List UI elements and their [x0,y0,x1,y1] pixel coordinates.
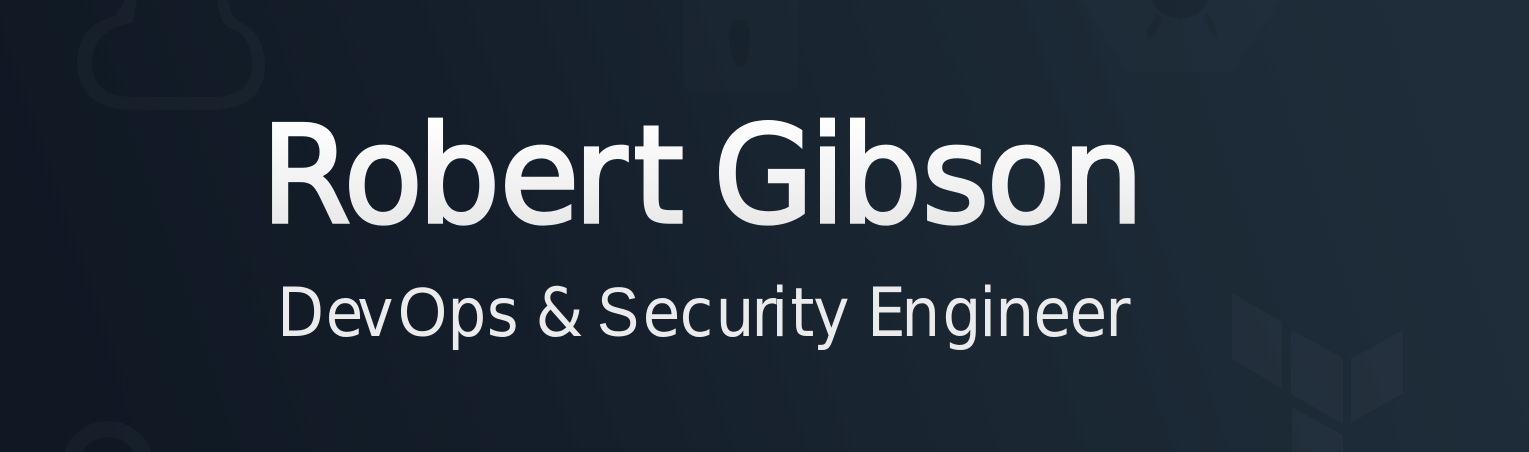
emblem circle [1151,0,1209,18]
emblem right leg [1203,12,1218,38]
title: Robert Gibson [261,98,1144,255]
subtitle: DevOps & Security Engineer [277,274,1131,353]
icon: padlock [683,0,798,92]
keyhole [729,20,750,67]
emblem left leg [1146,14,1163,39]
icon: cloud [77,0,265,110]
icon: terraform logo [1232,293,1403,452]
icon: ring at bottom left [64,421,152,452]
icon: shield emblem [1080,0,1280,72]
